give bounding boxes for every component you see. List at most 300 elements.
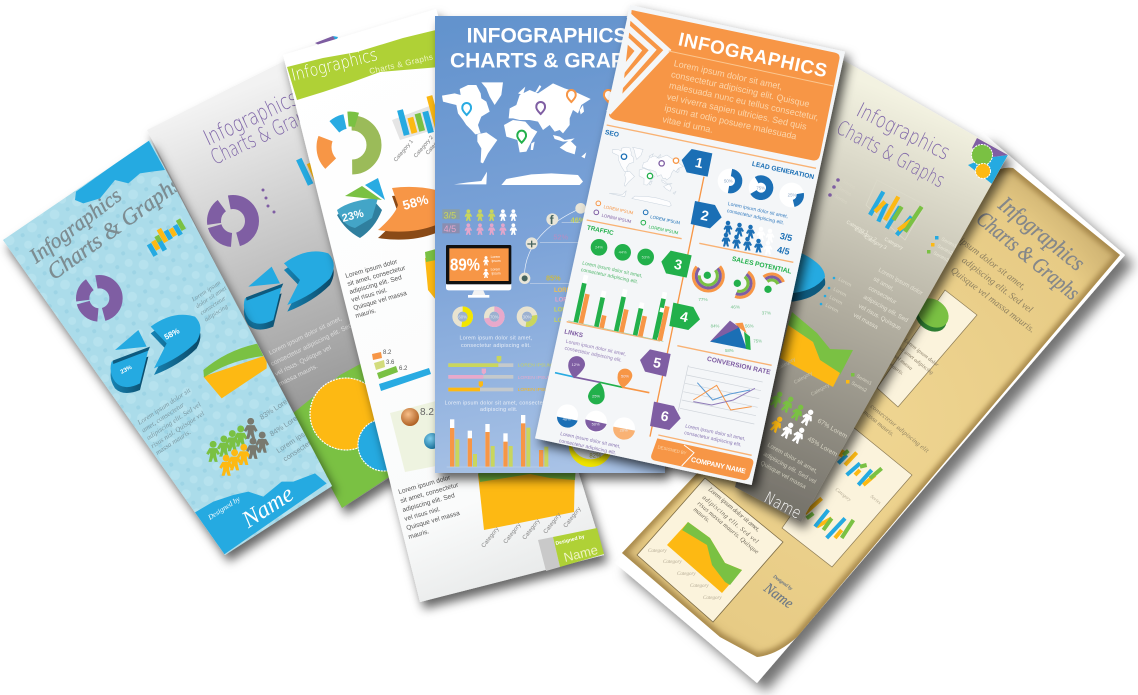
- beige pie fragment: [791, 253, 826, 302]
- beige pie legend text: [826, 277, 851, 312]
- tag 5: 5: [652, 354, 663, 371]
- white area chart axis labels: Category: [543, 512, 563, 535]
- white area chart fragment: [425, 249, 436, 300]
- sales potential heading: SALES POTENTIAL: [731, 256, 792, 276]
- white chart axis labels: Category 1: [393, 139, 415, 163]
- sheet: grey gradient infographic: [147, 36, 440, 508]
- textured signature: Name: [237, 481, 299, 534]
- rings caption: Lorem ipsum dolor sit amet,: [460, 336, 532, 342]
- white 3D pie: 23%: [341, 208, 365, 225]
- corner logo: [968, 138, 1008, 184]
- footer name: Name: [562, 542, 599, 565]
- sales mountain chart: [710, 321, 762, 353]
- links half spheres: 20%: [620, 427, 628, 432]
- textured pie labels: [120, 326, 181, 376]
- parchment page: [622, 168, 1120, 657]
- blue side labels: LOREM: [554, 318, 576, 324]
- beige chart legend: Series1: [940, 236, 958, 250]
- world map: [442, 82, 591, 185]
- links bubbles: 50%: [621, 373, 629, 378]
- header text: vel viverra sapien ultricies. Sed quis: [666, 92, 808, 132]
- blue pie fragment: 82%: [589, 453, 602, 459]
- links lower text: consectetur adipiscing elit.: [558, 438, 617, 456]
- sheet: blue infographic: [435, 16, 665, 473]
- monitor: ipsum: [492, 259, 501, 263]
- beige body text: adipiscing elit. Sed: [862, 295, 909, 324]
- parchment card with pie: Lorem ipsum dolor: [902, 337, 940, 369]
- beige body text: consectetur: [867, 286, 897, 306]
- social arc: 46%: [571, 216, 586, 225]
- beige footer text: [759, 443, 819, 491]
- parchment card with pie: sit amet adipiscing: [898, 346, 934, 376]
- traffic heading: TRAFFIC: [586, 224, 615, 237]
- purple ribbon corner: [315, 36, 338, 46]
- grey title: Infographics: [200, 86, 302, 151]
- textured body text: amet, consectetur: [140, 401, 186, 434]
- beige legend text: Series: [837, 186, 853, 198]
- white lower text: Quisque vel massa: [406, 510, 461, 532]
- parchment card with area chart: risus massa mauris. Quisque: [696, 500, 760, 556]
- orange dividers: [567, 125, 816, 455]
- beige body text: sit amet,: [872, 277, 895, 293]
- textured upper text: Lorem ipsum: [190, 279, 222, 304]
- textured people percentages: [260, 400, 310, 461]
- textured signature: Designed by: [205, 494, 242, 522]
- small world map: [603, 143, 685, 208]
- textured pie labels: 58%: [163, 326, 181, 342]
- blue side labels: [554, 288, 577, 324]
- links half spheres: [557, 404, 635, 440]
- footer name: [555, 534, 599, 565]
- white lower text: vel risus nisl.: [404, 506, 442, 523]
- parchment burnt edge: [622, 168, 1120, 657]
- white area chart axis labels: Category: [503, 522, 523, 545]
- sales arcs: [687, 255, 790, 305]
- white small bar chart: 6.2: [399, 366, 408, 372]
- slider bars: LOREN IPSUM: [518, 363, 552, 369]
- white area chart axis labels: Category: [522, 518, 542, 541]
- beige chart legend: Series2: [936, 243, 954, 257]
- links bubbles: [568, 356, 632, 404]
- sales labels: 77%: [698, 297, 708, 302]
- white lower text: Lorem ipsum dolor: [398, 474, 452, 496]
- parchment body text: Lorem ipsum dolor sit amet,: [935, 219, 1027, 292]
- grey body text: Lorem ipsum dolor sit amet,: [268, 315, 343, 357]
- bars caption: [445, 400, 550, 413]
- white bubble chart: 8.2: [420, 407, 434, 418]
- beige signature: Name: [761, 488, 805, 523]
- textured body text: Lorem ipsum dolor sit: [135, 386, 193, 427]
- links bubbles: 12%: [572, 362, 580, 367]
- beige body text: vel massa: [852, 313, 879, 331]
- beige people labels: 45% Lorem: [806, 436, 838, 458]
- beige page: [735, 60, 1008, 522]
- beige pie legend text: Lorem: [828, 295, 843, 307]
- area chart legend: Series2: [850, 381, 868, 394]
- beige title: [838, 102, 949, 187]
- textured upper text: adipiscing: [203, 303, 229, 323]
- blue title: [450, 25, 654, 72]
- white page: [283, 9, 604, 602]
- small map pins: [621, 154, 679, 179]
- sheet: white infographic with torn green header: [283, 9, 604, 602]
- monitor: Lorem: [491, 268, 500, 272]
- grey bar chart fragment: [299, 156, 320, 188]
- sheet: aged parchment infographic: [615, 133, 1125, 683]
- lead text: Lorem ipsum dolor sit amet,: [727, 201, 789, 220]
- textured people percentages: 84% Lorem: [268, 410, 304, 438]
- white body text upper: vel risus nisl.: [351, 287, 389, 304]
- parchment mid text: consectetur adipiscing elit: [869, 403, 930, 455]
- bars caption: Lorem ipsum dolor sit amet, consectetur: [445, 400, 550, 406]
- textured pie: [111, 315, 200, 393]
- beige body text: Lorem ipsum dolor: [877, 268, 923, 297]
- header text: consectetur adipiscing elit. Quisque: [670, 69, 810, 109]
- ring chart labels: 30%: [523, 314, 531, 319]
- area chart labels: Category: [810, 382, 831, 398]
- social arc: 52%: [553, 232, 568, 241]
- parchment card with pie: [877, 290, 977, 407]
- footer text: COMPANY NAME: [690, 457, 747, 476]
- traffic text: consectetur adipiscing elit.: [580, 267, 639, 285]
- beige chart labels: [846, 220, 903, 250]
- beige chart labels: Category: [883, 236, 904, 252]
- grey title: [200, 86, 325, 170]
- parchment card with area chart: mauris.: [692, 506, 712, 524]
- textured upper text: dolor sit amet: [195, 285, 228, 310]
- textured body text: risus nisl. Quisque vel: [149, 409, 206, 450]
- seo legend: LOREM IPSUM: [648, 224, 679, 236]
- lead text: consectetur adipiscing elit.: [726, 208, 785, 226]
- header title: Infographics: [289, 45, 380, 86]
- map pins: [462, 90, 613, 143]
- orange header: [609, 10, 840, 161]
- seo legend: [594, 201, 681, 236]
- white area chart axis labels: [481, 506, 583, 549]
- white small bar chart: [372, 350, 431, 391]
- rings caption: [460, 336, 532, 349]
- parchment card with pie: vel massa: [893, 354, 914, 372]
- textured people percentages: Lorem ipsum: [275, 424, 315, 455]
- parchment card with two bar charts: Series: [869, 495, 882, 506]
- beige chart legend: Series3: [932, 250, 950, 264]
- grey body text: massa mauris.: [278, 363, 319, 388]
- header title: INFOGRAPHICS: [676, 29, 829, 82]
- tag 4: 4: [679, 308, 690, 325]
- sales mountain chart: 84%: [711, 324, 719, 329]
- beige chart labels: Category 3: [863, 234, 888, 251]
- beige pie legend: [820, 277, 835, 305]
- blue side labels: LOREM: [554, 307, 576, 313]
- parchment body text: adipiscing elit. Sed vel: [959, 256, 1034, 316]
- bars caption: adipiscing elit.: [480, 407, 518, 413]
- blue title: CHARTS & GRAPHS: [450, 49, 654, 72]
- white lower text: [398, 474, 461, 541]
- traffic text: Lorem ipsum dolor sit amet,: [582, 260, 643, 279]
- textured footer band: [193, 473, 327, 555]
- social arc: f: [550, 213, 555, 227]
- beige footer text: Quisque vel massa: [759, 461, 807, 491]
- parchment title: [972, 191, 1090, 305]
- white area chart axis labels: Category: [563, 506, 583, 529]
- tag 3: 3: [673, 256, 684, 273]
- traffic badges: 24%: [595, 245, 603, 250]
- parchment card with two bar charts: Category: [834, 488, 852, 504]
- footer text: DESIGNED BY: [657, 444, 687, 456]
- ring chart labels: 60%: [458, 314, 467, 319]
- parchment title: Charts & Graphs: [972, 206, 1085, 305]
- beige pie legend text: Lorem: [837, 277, 852, 289]
- area chart legend: [846, 373, 872, 392]
- traffic badges: 44%: [619, 250, 627, 255]
- links bubbles: 25%: [592, 393, 600, 398]
- beige people labels: [808, 418, 847, 456]
- grey green footer with circles: [292, 345, 430, 508]
- parchment signature: Designed by: [772, 573, 793, 591]
- grey legend: [262, 188, 276, 214]
- tag 1: 1: [694, 154, 705, 171]
- parchment card with area chart: Category: [648, 549, 667, 554]
- seo legend: LOREM IPSUM: [650, 214, 681, 226]
- header text: ipsum at odio posuere malesuada: [664, 103, 797, 141]
- monitor: ipsum: [492, 272, 501, 276]
- white chart axis labels: Category 3: [425, 132, 447, 156]
- beige footer text: adipiscing elit. Sed vel: [762, 452, 817, 486]
- lead donuts: 25%: [788, 193, 796, 198]
- textured bar chart: [145, 219, 188, 256]
- tag 6: 6: [659, 407, 671, 425]
- parchment card with area chart: [637, 478, 783, 622]
- lead donuts: 50%: [724, 179, 733, 184]
- monitor: [446, 245, 511, 298]
- beige area chart: [780, 312, 853, 387]
- tag 1: [682, 149, 712, 177]
- beige title: Charts & Graphs: [833, 115, 949, 192]
- white 3D pie: [337, 178, 436, 240]
- orange footer: [651, 438, 753, 480]
- beige legend text: [836, 197, 843, 201]
- green footer tag: [553, 528, 604, 567]
- white chart axis labels: Category 2: [413, 135, 435, 159]
- white 3D bar chart: [392, 96, 440, 140]
- tag 6: [650, 402, 681, 430]
- header text: [662, 58, 820, 141]
- social arc: 85%: [546, 274, 561, 283]
- white area chart: [478, 464, 576, 530]
- fraction icons: 3/5: [444, 210, 456, 220]
- lead people: 4/5: [776, 245, 791, 257]
- tag 3: [661, 251, 692, 278]
- seo heading: SEO: [604, 129, 619, 139]
- traffic last bars: [654, 307, 669, 339]
- grey page: [147, 38, 440, 508]
- textured area chart: [203, 343, 267, 398]
- fraction icons: 4/5: [444, 224, 456, 234]
- header text: Lorem ipsum dolor sit amet,: [673, 58, 783, 92]
- links half spheres: 50%: [592, 421, 600, 426]
- header text: vitae id urna.: [662, 114, 714, 135]
- header chevrons: [608, 15, 667, 113]
- beige people: [770, 392, 814, 444]
- blue title: INFOGRAPHICS: [467, 25, 628, 48]
- textured signature: [208, 490, 294, 528]
- lead donuts: 75%: [756, 185, 765, 190]
- header rule: [669, 51, 833, 86]
- textured page: [3, 140, 332, 555]
- sales arc centers: [704, 272, 772, 293]
- textured donut: [83, 282, 116, 315]
- parchment card with area chart: Category: [690, 584, 709, 589]
- parchment signature: Name: [760, 580, 796, 612]
- beige chart legend: [927, 236, 956, 262]
- beige pie legend text: Lorem: [832, 287, 847, 299]
- grey body text: consectetur adipiscing elit. Sed: [270, 322, 354, 368]
- white small bar chart: 3.6: [386, 360, 395, 366]
- textured people percentages: 83% Lorem: [258, 394, 294, 422]
- ring charts: [455, 308, 536, 326]
- parchment mid text: massa mauris.: [862, 409, 896, 438]
- textured pie labels: 23%: [120, 365, 134, 376]
- lead people: [721, 221, 793, 257]
- grey pie: [244, 251, 334, 330]
- rings caption: consectetur adipiscing elit.: [461, 343, 531, 349]
- beige chart labels: Category 2: [853, 226, 878, 243]
- parchment card with pie: mauris.: [888, 362, 905, 377]
- white lower text: adipiscing elit. Sed: [402, 492, 456, 514]
- textured people: [206, 418, 269, 476]
- links text: Lorem ipsum dolor sit amet,: [565, 339, 627, 358]
- parchment body text: Quisque vel massa mauris.: [948, 266, 1036, 335]
- beige body text: [852, 268, 923, 332]
- textured body text: massa mauris.: [154, 428, 192, 457]
- textured title: Charts & Graphs: [42, 171, 185, 285]
- torn green header: [287, 29, 440, 100]
- footer name: Designed by: [555, 534, 586, 547]
- line chart: [678, 365, 763, 424]
- sales mountain chart: 56%: [745, 323, 754, 328]
- white lower text: mauris.: [408, 528, 430, 541]
- beige body text: vel risus. Quisque: [857, 304, 902, 332]
- parchment card with area chart: Category: [677, 572, 696, 577]
- textured body text: [138, 388, 204, 455]
- tag 2: 2: [699, 207, 711, 224]
- area chart labels: [777, 358, 829, 396]
- links half spheres: 40%: [563, 417, 571, 422]
- blue page: [435, 16, 665, 473]
- grey title: Charts & Graphs: [207, 97, 325, 170]
- area chart legend: Series1: [855, 374, 873, 387]
- white 3D pie: 58%: [401, 192, 430, 213]
- slider bars: LOREN IPSUM: [518, 387, 552, 393]
- white chart axis labels: [393, 132, 447, 163]
- beige title: Infographics: [853, 98, 954, 165]
- textured header band: [75, 140, 165, 203]
- grey body text: [268, 315, 354, 388]
- textured upper text: consectetur: [199, 295, 228, 317]
- ring chart labels: [458, 314, 531, 319]
- links text: consectetur adipiscing elit.: [564, 345, 622, 364]
- beige bar chart: [866, 190, 924, 240]
- lead generation heading: LEAD GENERATION: [751, 161, 815, 181]
- white body text upper: Lorem ipsum dolor: [345, 258, 399, 280]
- white body text upper: adipiscing elit. Sed: [349, 274, 403, 296]
- tag 4: [669, 303, 700, 330]
- parchment title: Infographics: [993, 191, 1090, 276]
- beige chart labels: Category 1: [845, 219, 870, 236]
- white area chart axis labels: Category: [481, 526, 501, 549]
- blue side labels: LOREM: [554, 288, 576, 294]
- line chart text: Lorem ipsum dolor sit amet,: [685, 423, 746, 442]
- footer text: [657, 444, 747, 476]
- white body text upper: Quisque vel massa: [353, 290, 408, 312]
- textured people percentages: consectetur: [281, 435, 318, 463]
- parchment card with two bar charts: [782, 427, 912, 567]
- tag 5: [640, 349, 671, 377]
- white bubble chart: [390, 401, 440, 472]
- page curl: [538, 537, 560, 571]
- traffic badges: 53%: [642, 254, 650, 259]
- ring chart labels: 70%: [490, 314, 499, 319]
- sales mountain chart: 58%: [725, 348, 734, 353]
- white small bar chart: 8.2: [383, 350, 392, 356]
- beige footer text: Lorem dolor sit amet,: [766, 443, 819, 475]
- line chart text: consectetur adipiscing elit.: [684, 430, 742, 448]
- parchment body text: [935, 219, 1036, 335]
- slider bars: [448, 356, 552, 393]
- monitor: 89%: [450, 255, 480, 275]
- seo legend: LOREM IPSUM: [601, 213, 632, 224]
- parchment card with area chart: Category: [663, 560, 682, 565]
- slider bars: LOREN IPSUM: [518, 375, 552, 381]
- beige legend text: Series: [833, 194, 849, 206]
- links lower text: Lorem ipsum dolor sit amet,: [560, 431, 621, 450]
- beige legend text: Series: [841, 179, 857, 191]
- white body text upper: sit amet, consectetur: [347, 264, 407, 288]
- sales labels: [698, 297, 771, 315]
- sheet: front orange infographic: [535, 5, 845, 485]
- monitor: Lorem: [491, 255, 500, 259]
- grey donut: [214, 202, 252, 240]
- social arc: [519, 203, 586, 284]
- links timeline: [555, 373, 649, 393]
- blue side labels: LOREM: [555, 298, 577, 304]
- white body text upper: [345, 258, 408, 320]
- sales mountain chart: 75%: [753, 338, 762, 343]
- parchment card with area chart: Category: [703, 596, 722, 601]
- footer arrow: [682, 445, 694, 466]
- beige legend: [828, 178, 840, 197]
- white lower text: sit amet, consectetur: [400, 481, 460, 505]
- textured body text: adipiscing elit. Sed vel: [145, 400, 203, 442]
- parchment white backing: [615, 133, 1125, 683]
- blue pie fragment: [569, 419, 613, 467]
- header title: Charts & Graphs: [368, 53, 434, 76]
- tag 2: [691, 201, 722, 228]
- fraction icons: [442, 209, 517, 235]
- area chart labels: Category: [793, 370, 814, 386]
- lead people: 3/5: [779, 231, 793, 243]
- sheet: textured blue infographic: [3, 140, 332, 555]
- front page: [535, 5, 845, 485]
- beige people labels: 67% Lorem: [816, 418, 848, 440]
- sales labels: 37%: [762, 310, 771, 315]
- header text: malesuada nunc eu tellus consectetur,: [668, 80, 820, 123]
- header title: [289, 45, 434, 86]
- white donut: [324, 119, 374, 171]
- traffic bar chart: [568, 273, 674, 341]
- white body text upper: mauris.: [355, 307, 377, 320]
- timeline spine: [650, 177, 704, 437]
